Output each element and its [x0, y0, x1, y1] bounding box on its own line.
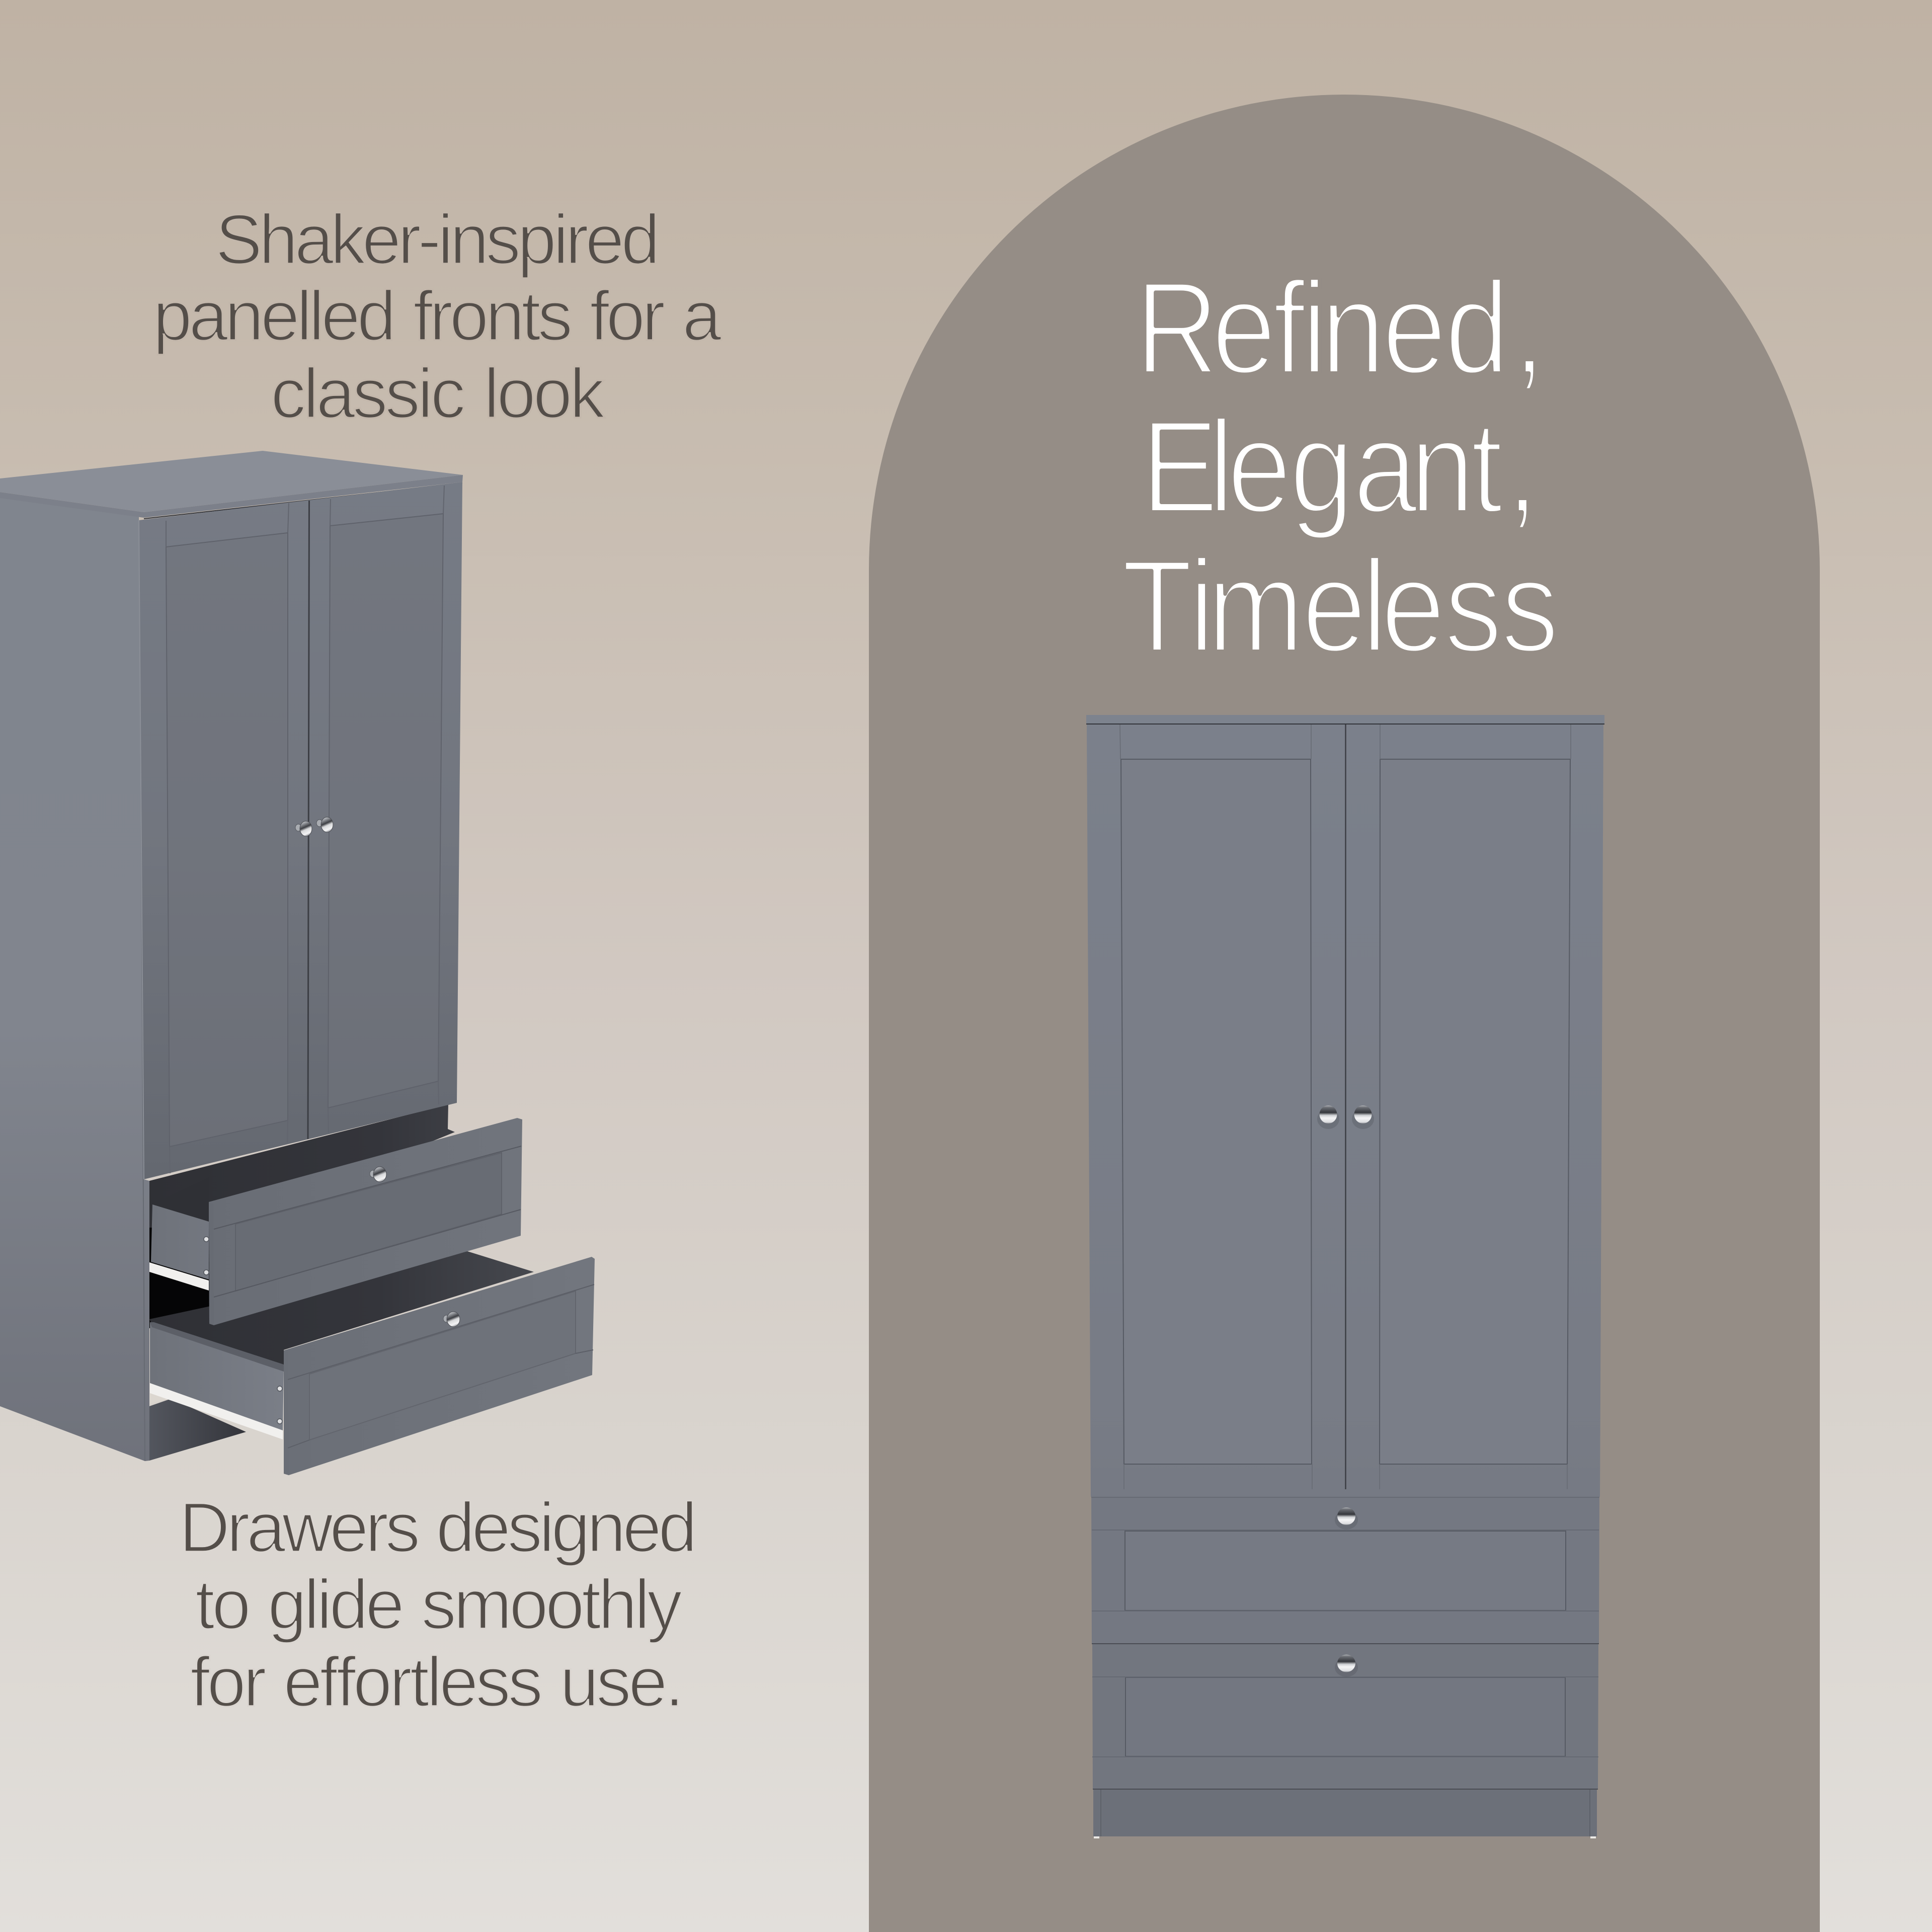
front-facing wardrobe [1086, 715, 1604, 1838]
cavity black gap [149, 1228, 216, 1328]
upper drawer front [209, 1118, 522, 1325]
heading: Timeless [1121, 533, 1559, 680]
plinth [149, 1399, 246, 1461]
upper drawer screws [204, 1237, 209, 1275]
lower drawer interior [149, 1251, 534, 1370]
door body [1087, 725, 1603, 1497]
interior cavity [149, 1104, 455, 1233]
text block: drawers [179, 1488, 697, 1721]
wardrobe top band [1086, 715, 1604, 725]
doors [139, 482, 462, 1179]
door knobs [1319, 1105, 1372, 1123]
door seams [1120, 725, 1571, 1489]
top drawer [1091, 1497, 1599, 1644]
upper drawer interior [152, 1177, 209, 1222]
upper drawer runner [149, 1262, 209, 1291]
lower drawer knob [443, 1312, 460, 1327]
angled wardrobe with open drawers [0, 451, 595, 1475]
text block: shaker panels [153, 200, 721, 433]
lower drawer [149, 1251, 595, 1475]
heading [1121, 255, 1559, 680]
upper drawer [149, 1118, 522, 1325]
drawer knobs [1337, 1507, 1355, 1672]
text block: drawers: to glide smoothly [195, 1565, 682, 1644]
panel: arch [869, 95, 1820, 1932]
heading: Refined, [1135, 255, 1546, 401]
door knobs [295, 817, 333, 836]
text block: shaker panels: classic look [271, 354, 605, 433]
left door panel [1121, 759, 1312, 1464]
text block: shaker panels: Shaker-inspired [215, 200, 660, 279]
lower drawer side [150, 1322, 284, 1430]
lower drawer rim [150, 1322, 284, 1372]
heading: Elegant, [1141, 393, 1539, 540]
upper drawer side [151, 1204, 209, 1279]
drawer knob shadows [1335, 1510, 1358, 1677]
wardrobe side [0, 493, 149, 1461]
wardrobe feet [1094, 1836, 1596, 1838]
wardrobe top [0, 451, 463, 519]
text block: shaker panels: panelled fronts for a [153, 276, 721, 355]
lower drawer screws [277, 1386, 282, 1424]
text block: drawers: for effortless use. [190, 1642, 684, 1721]
bottom drawer [1092, 1644, 1598, 1789]
plinth [1093, 1790, 1597, 1836]
lower drawer front [284, 1257, 595, 1475]
right door panel [1380, 759, 1570, 1464]
lower drawer runner [150, 1383, 283, 1439]
door knob shadows [1317, 1109, 1374, 1129]
upper drawer knob [370, 1167, 386, 1182]
text block: drawers: Drawers designed [179, 1488, 697, 1567]
gap under runner [150, 1393, 167, 1404]
